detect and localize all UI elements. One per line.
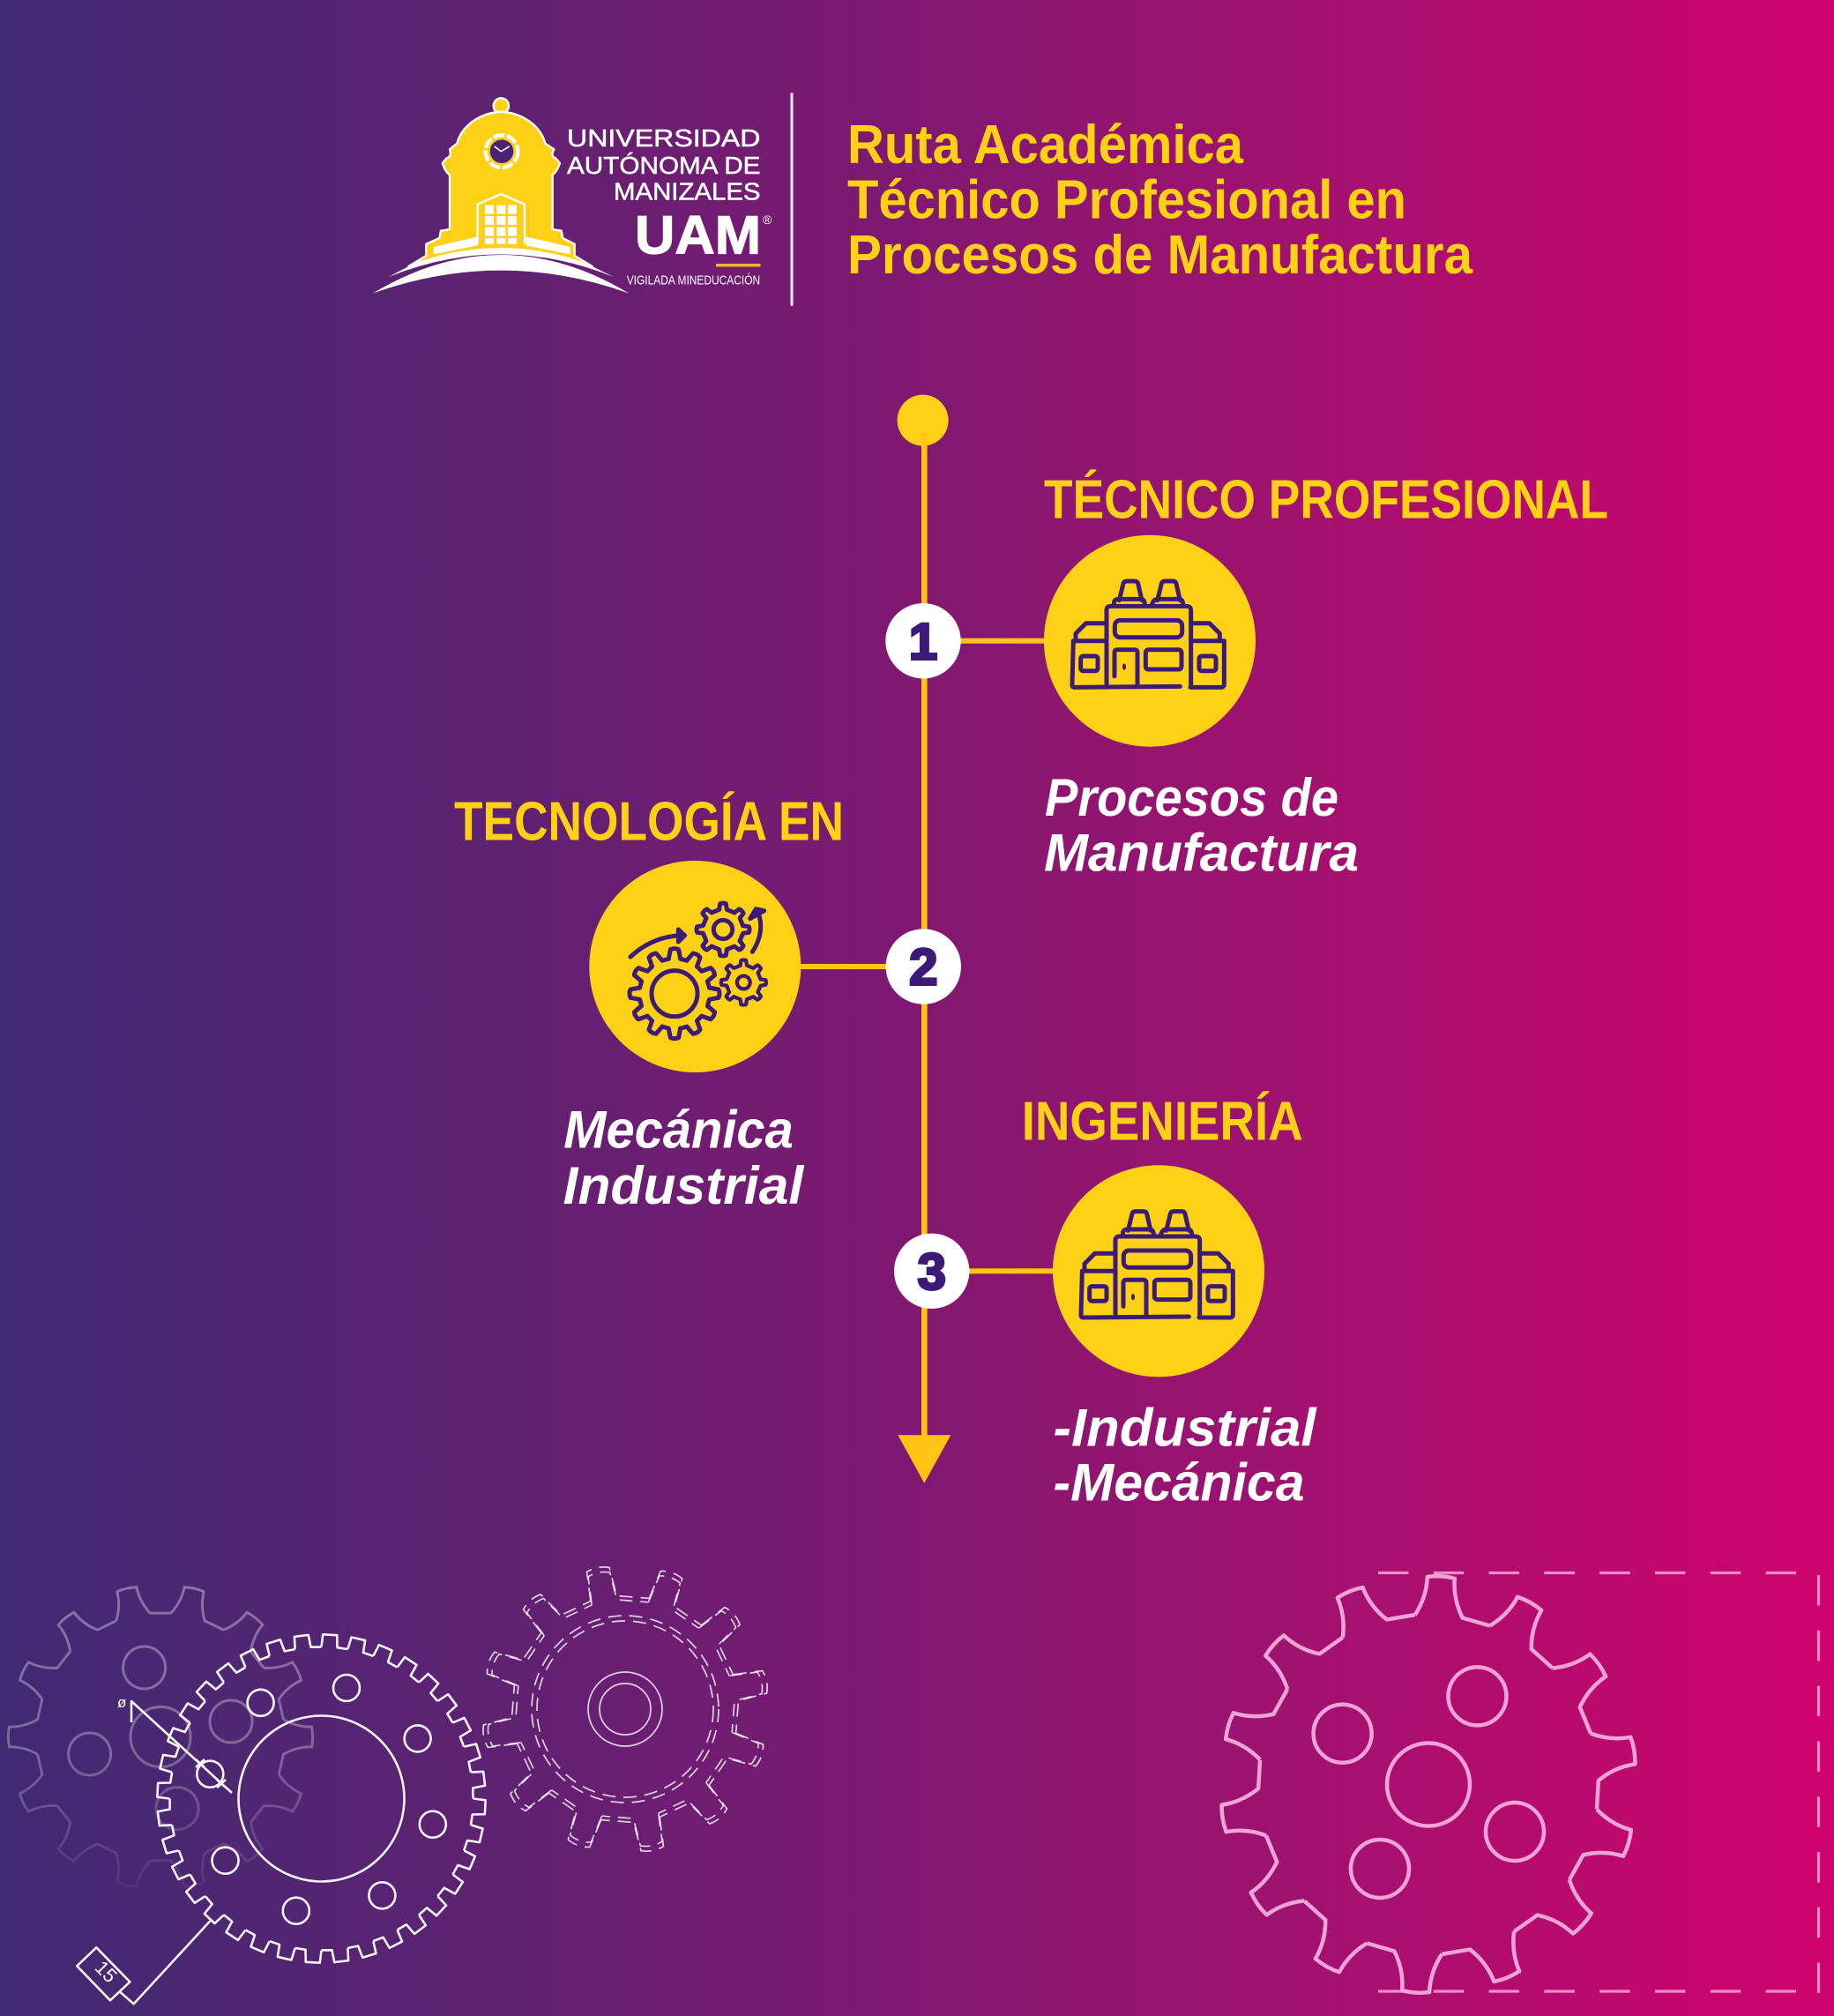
logo wordmark — [567, 124, 772, 288]
connector 3 — [965, 1268, 1058, 1273]
text: Industrial, Mecánica: -Mecánica — [1053, 1453, 1305, 1512]
icon circle: gears — [589, 861, 801, 1072]
icon: gears and arrows — [630, 903, 766, 1039]
heading: TECNOLOGÍA EN: TECNOLOGÍA EN — [454, 792, 844, 853]
title — [847, 115, 1472, 286]
text: Mecánica Industrial: Mecánica — [563, 1101, 794, 1160]
label box 15 — [77, 1947, 130, 2000]
logo wordmark: MANIZALES — [614, 178, 760, 205]
label box 15: 15 — [91, 1956, 122, 1987]
text: Procesos de Manufactura: Procesos de — [1045, 768, 1338, 827]
heading: TÉCNICO PROFESIONAL: TÉCNICO PROFESIONAL — [1044, 470, 1608, 531]
text: Industrial, Mecánica — [1053, 1398, 1317, 1512]
dashed frame bottom right — [1378, 1573, 1818, 1993]
text: Procesos de Manufactura: Manufactura — [1044, 824, 1359, 883]
header logo: Universidad Autónoma de Manizales — [373, 98, 772, 294]
text: Mecánica Industrial — [563, 1101, 805, 1215]
leader line — [120, 1921, 210, 2004]
text: Industrial, Mecánica: -Industrial — [1053, 1398, 1317, 1457]
step 2: Tecnología en — [454, 792, 961, 1215]
pink gear bottom right — [1214, 1572, 1643, 1997]
icon circle: factory — [1053, 1165, 1264, 1377]
icon circle: factory — [1044, 535, 1256, 747]
number badge 1: 1 — [909, 614, 937, 670]
number badge 1 — [885, 603, 961, 678]
connector 1 — [957, 638, 1049, 644]
large toothed gear with dimension — [77, 1625, 495, 2004]
text: Procesos de Manufactura — [1044, 768, 1359, 883]
logo wordmark: VIGILADA MINEDUCACIÓN — [627, 273, 760, 288]
step 1: Técnico Profesional — [885, 470, 1608, 883]
logo wordmark: UNIVERSIDAD — [567, 124, 760, 152]
logo wordmark: ® — [763, 213, 772, 227]
title: Ruta Académica — [847, 115, 1243, 175]
dashed gear — [438, 1522, 812, 1896]
title: Técnico Profesional en — [847, 169, 1406, 230]
number badge 2: 2 — [909, 938, 937, 997]
step 3: Ingeniería — [894, 1092, 1317, 1512]
timeline vertical arrow — [898, 395, 951, 1483]
connector 2 — [798, 964, 891, 969]
number badge 2 — [886, 929, 961, 1004]
logo wordmark: AUTÓNOMA DE — [567, 152, 760, 179]
number badge 3: 3 — [918, 1243, 946, 1301]
faded gear bottom left — [7, 1580, 314, 1893]
dimension line — [131, 1701, 232, 1793]
logo wordmark: UAM — [635, 205, 761, 265]
number badge 3 — [894, 1234, 969, 1309]
logo building emblem — [373, 98, 629, 294]
title: Procesos de Manufactura — [847, 225, 1472, 286]
text: Mecánica Industrial: Industrial — [563, 1156, 805, 1215]
heading: INGENIERÍA: INGENIERÍA — [1022, 1092, 1303, 1153]
dimension symbol: ø — [117, 1694, 126, 1711]
header divider — [790, 93, 794, 306]
